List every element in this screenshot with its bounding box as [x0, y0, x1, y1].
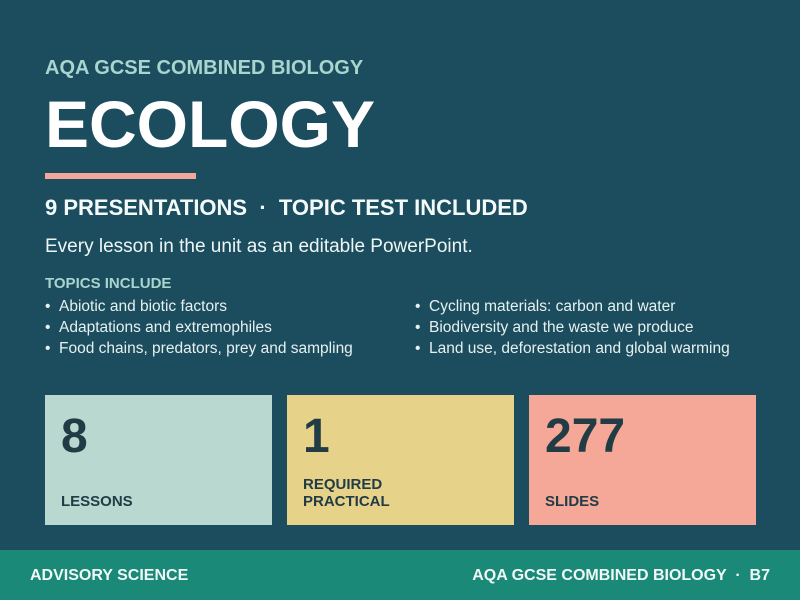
topics list right	[415, 298, 730, 357]
accent bar	[45, 173, 196, 179]
panel: slides stat	[529, 395, 756, 525]
stat number: 277	[545, 410, 625, 463]
topic item	[45, 298, 227, 315]
topic item: •	[415, 340, 420, 357]
topic item: •	[45, 319, 50, 336]
topics list left: Adaptations and extremophiles	[59, 319, 272, 336]
topic item	[45, 319, 272, 336]
topic item	[415, 340, 730, 357]
topic item	[415, 298, 676, 315]
topics list right: Biodiversity and the waste we produce	[429, 319, 694, 336]
topic item: •	[415, 319, 420, 336]
stat number: 1	[303, 410, 330, 463]
stat label: SLIDES	[545, 493, 599, 510]
topic item: •	[45, 298, 50, 315]
topic item: •	[45, 340, 50, 357]
topic item	[45, 340, 353, 357]
stat label: LESSONS	[61, 493, 133, 510]
topics list left	[45, 298, 353, 357]
stat label: PRACTICAL	[303, 493, 390, 510]
topic item	[415, 319, 694, 336]
title: ECOLOGY	[45, 87, 375, 161]
description: Every lesson in the unit as an editable PowerPoint.	[45, 236, 473, 257]
panel: lessons stat	[45, 395, 272, 525]
subtitle: 9 PRESENTATIONS · TOPIC TEST INCLUDED	[45, 195, 528, 220]
stat label: REQUIRED	[303, 476, 382, 493]
footer course label: AQA GCSE COMBINED BIOLOGY · B7	[472, 567, 770, 584]
panel: required practical stat	[287, 395, 514, 525]
topics list left: Abiotic and biotic factors	[59, 298, 227, 315]
topics heading: TOPICS INCLUDE	[45, 275, 171, 292]
stat number: 8	[61, 410, 88, 463]
topics list right: Land use, deforestation and global warming	[429, 340, 730, 357]
topic item: •	[415, 298, 420, 315]
footer brand: ADVISORY SCIENCE	[30, 567, 188, 584]
topics list left: Food chains, predators, prey and sampling	[59, 340, 353, 357]
footer band	[0, 550, 800, 600]
topics list right: Cycling materials: carbon and water	[429, 298, 675, 315]
eyebrow heading: AQA GCSE COMBINED BIOLOGY	[45, 57, 363, 79]
stat label	[303, 476, 390, 510]
